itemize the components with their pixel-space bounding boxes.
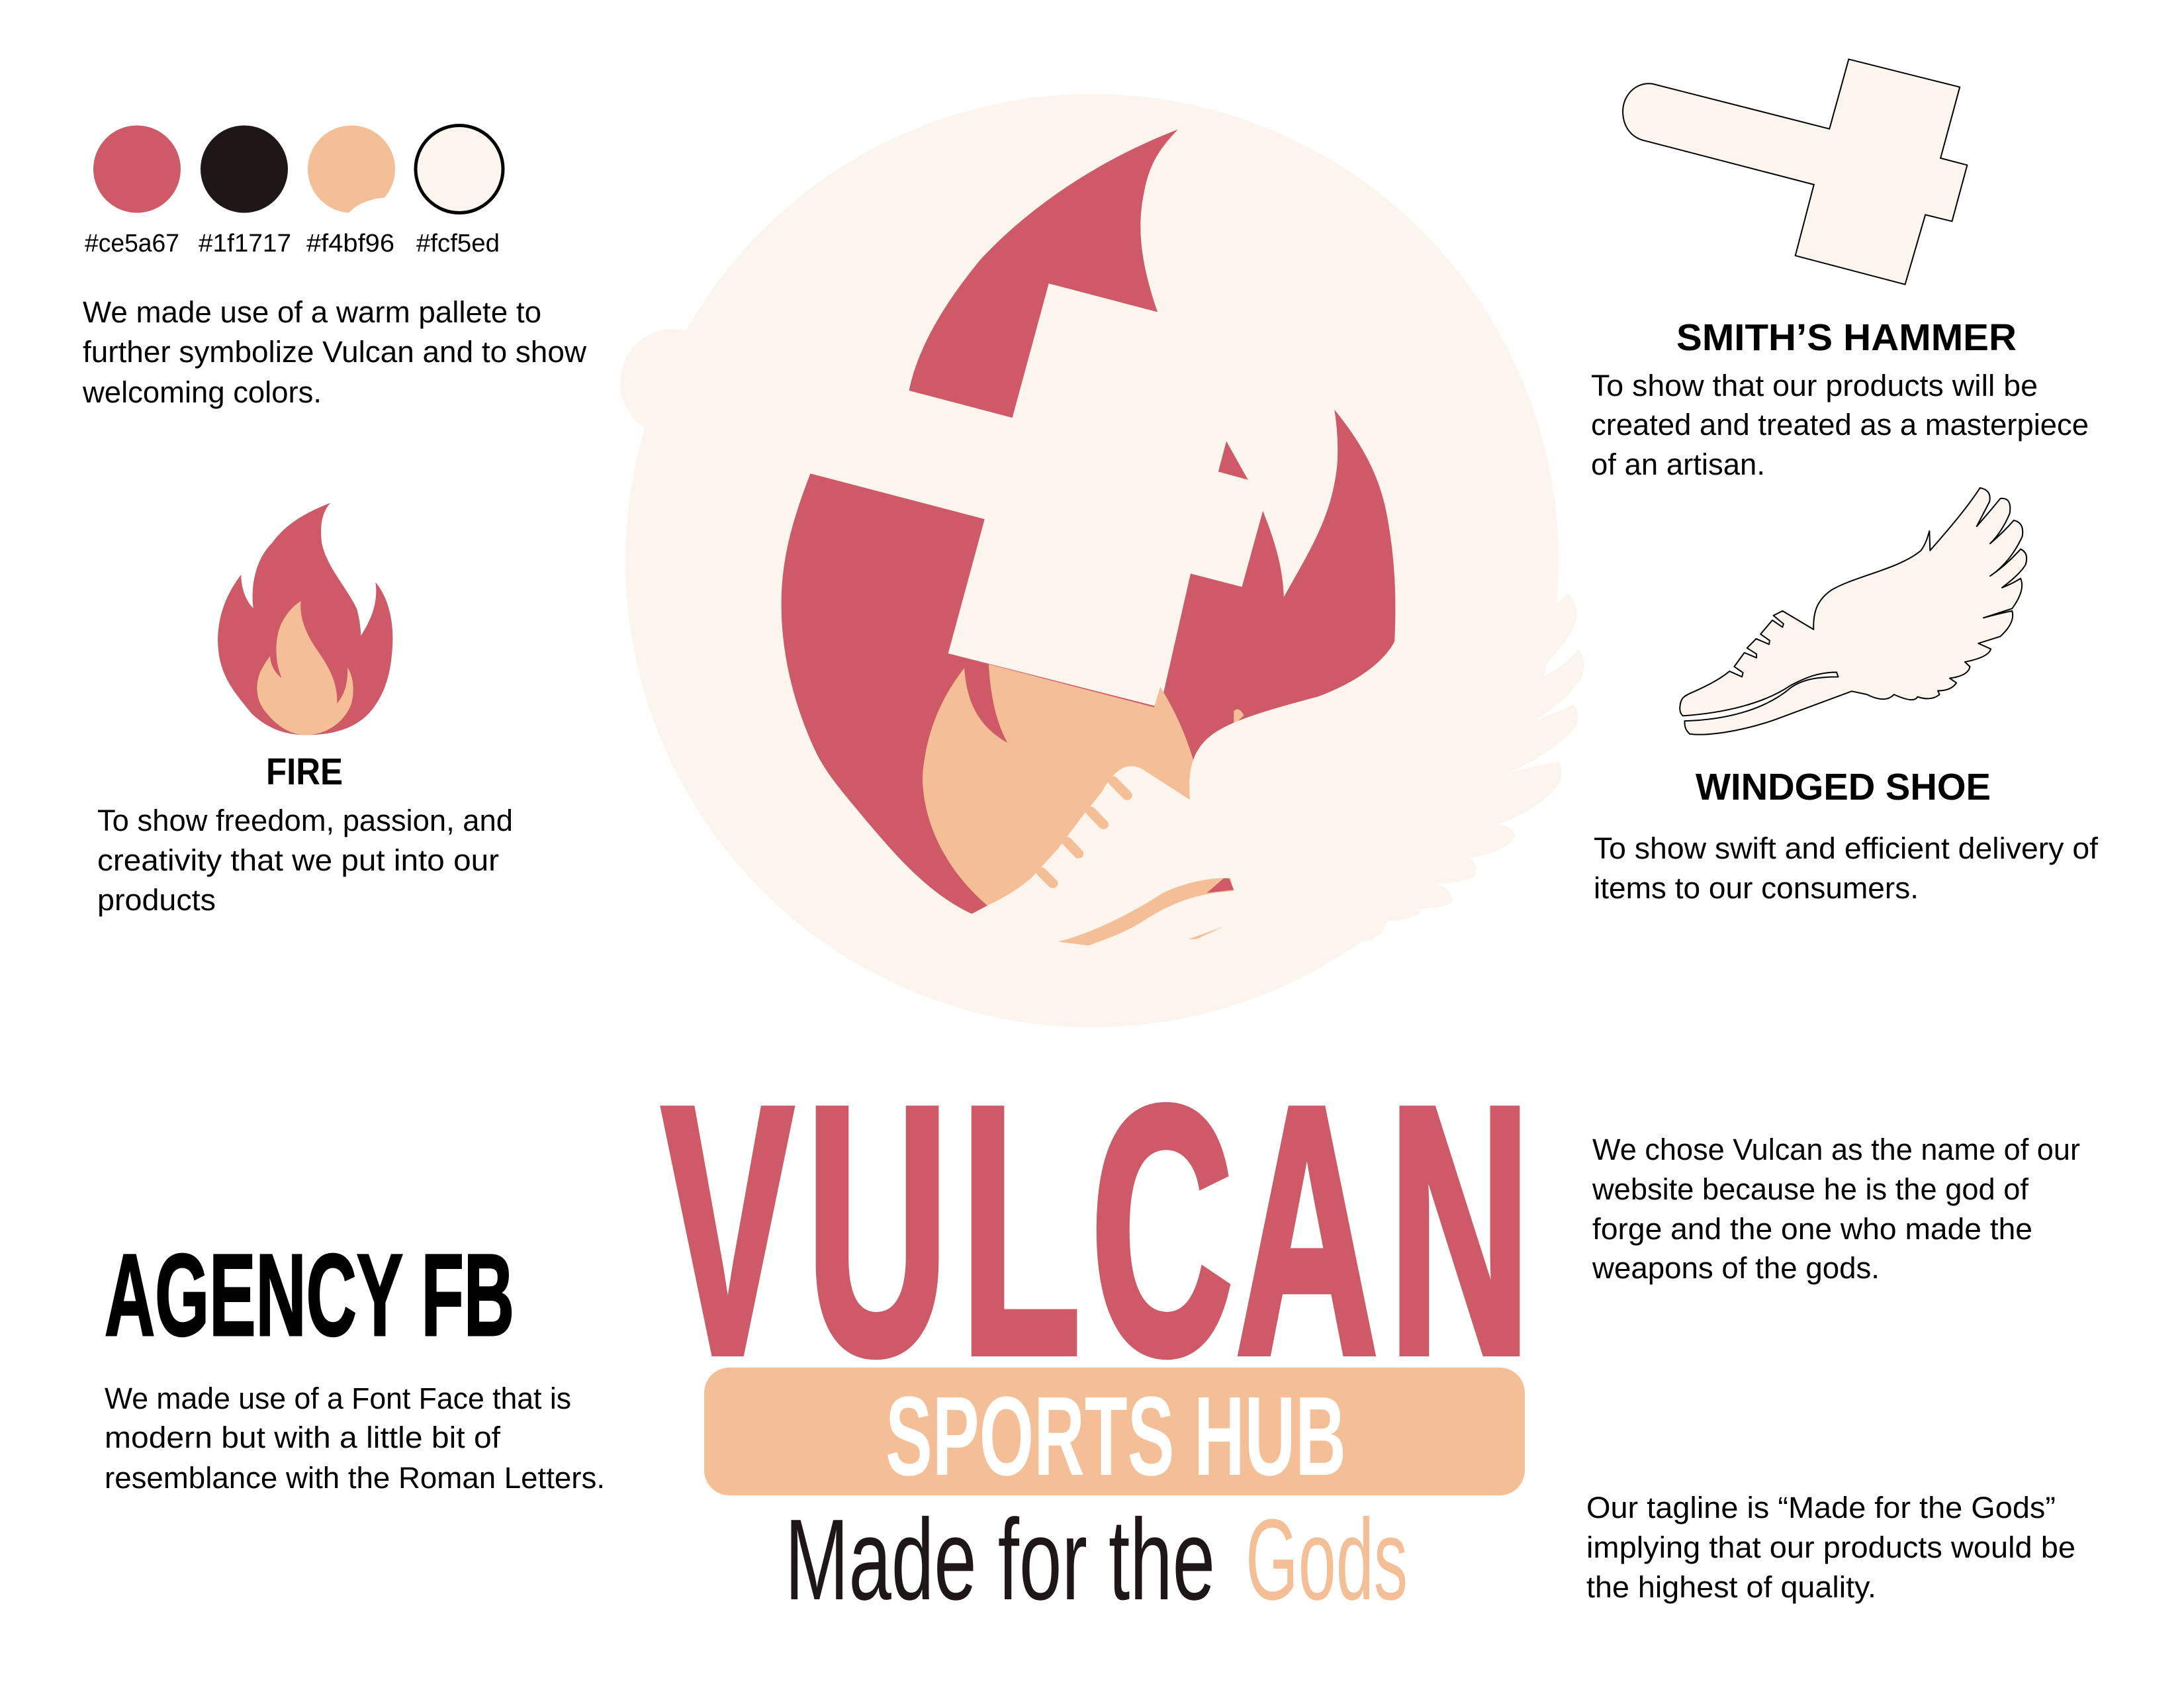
hammer description: To show that our products will be [1591,369,2038,402]
palette description: further symbolize Vulcan and to show [83,335,587,369]
emblem artwork [782,130,1584,972]
wordmark: VULCAN: VULCAN [662,1034,1531,1428]
tagline rationale: Our tagline is “Made for the Gods” [1586,1491,2056,1524]
palette hex labels: #1f1717 [199,230,291,258]
tagline: Gods [1246,1495,1408,1624]
name rationale: website because he is the god of [1592,1172,2028,1206]
tagline: Made for the [785,1495,1215,1624]
icon: fire [218,503,392,735]
palette hex labels: #fcf5ed [416,230,500,258]
font description [105,1382,605,1495]
palette description [82,295,587,409]
fire description: creativity that we put into our [97,843,499,877]
fire description [97,804,513,917]
color palette swatches [93,126,503,220]
font description: modern but with a little bit of [105,1421,501,1454]
font description: We made use of a Font Face that is [105,1382,571,1415]
emblem background circle [625,94,1559,1027]
tagline rationale: the highest of quality. [1586,1570,1876,1604]
winged shoe description: To show swift and efficient delivery of [1594,831,2098,865]
palette description: welcoming colors. [82,375,322,409]
hammer description: created and treated as a masterpiece [1591,408,2089,442]
name rationale: forge and the one who made the [1592,1212,2032,1246]
heading: smith's hammer: SMITH’S HAMMER [1676,316,2017,359]
fire description: products [97,883,216,917]
tagline rationale: implying that our products would be [1586,1530,2075,1564]
heading: winged shoe: WINDGED SHOE [1696,766,1991,808]
winged shoe description: items to our consumers. [1594,871,1919,905]
name rationale [1592,1133,2080,1285]
central logo emblem [620,94,1584,1027]
sports hub banner [704,1368,1525,1499]
palette description: We made use of a warm pallete to [83,295,541,329]
winged shoe description [1594,831,2098,905]
name rationale: weapons of the gods. [1592,1251,1880,1285]
hammer description [1591,369,2089,481]
icon: smith's hammer [1623,59,1967,285]
banner text: SPORTS HUB: SPORTS HUB [886,1374,1346,1499]
fire description: To show freedom, passion, and [97,804,513,837]
palette hex labels: #f4bf96 [306,230,394,258]
emblem hammer handle end [620,329,726,436]
font name: AGENCY FB: AGENCY FB [105,1231,514,1360]
palette hex labels [85,230,500,258]
tagline rationale [1586,1491,2075,1604]
heading: fire: FIRE [266,751,343,793]
palette hex labels: #ce5a67 [85,230,179,258]
icon: winged shoe [1680,488,2026,735]
font description: resemblance with the Roman Letters. [105,1461,605,1495]
hammer description: of an artisan. [1591,447,1765,481]
name rationale: We chose Vulcan as the name of our [1592,1133,2080,1166]
